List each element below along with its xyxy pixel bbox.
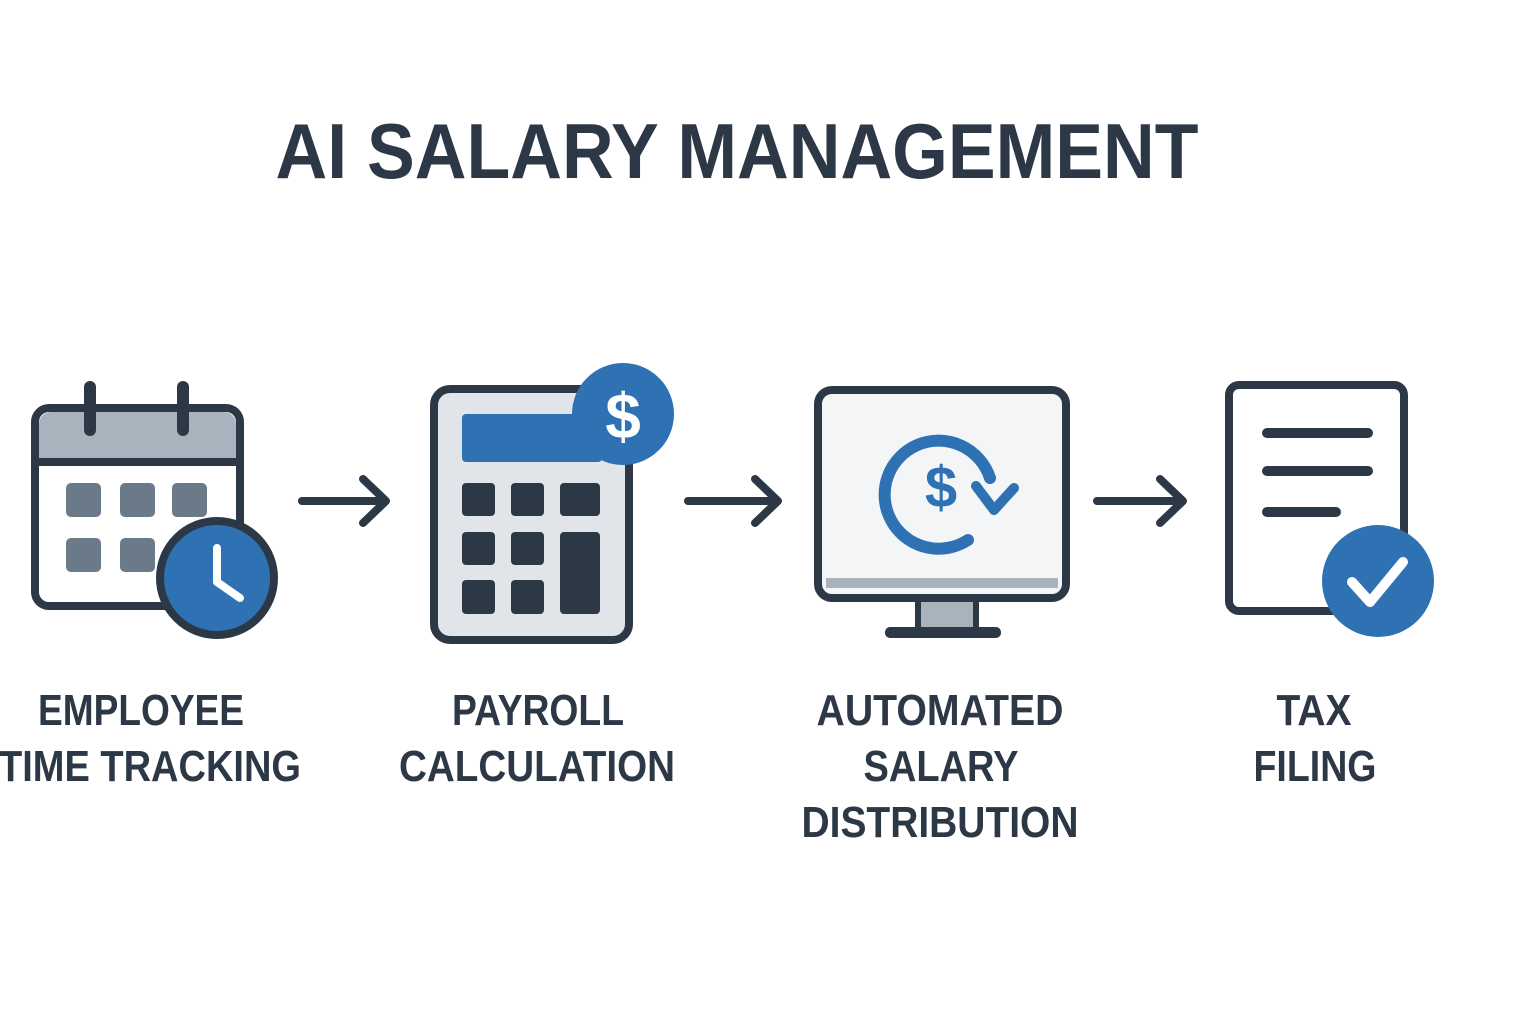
label: automated salary distribution: SALARY (864, 742, 1018, 791)
title: AI SALARY MANAGEMENT (276, 107, 1198, 195)
arrow 2 (688, 479, 778, 523)
icon: monitor with circular dollar (818, 390, 1066, 638)
icon: calculator with dollar (434, 363, 674, 640)
label: employee time tracking: EMPLOYEE (38, 686, 244, 735)
label: payroll calculation (399, 686, 675, 791)
label: tax filing: TAX (1276, 686, 1352, 735)
label: automated salary distribution (802, 686, 1078, 847)
arrow 1 (302, 479, 386, 523)
icon: calculator with dollar: $ (605, 380, 641, 452)
icon: calendar with clock (35, 387, 274, 635)
label: payroll calculation: PAYROLL (452, 686, 624, 735)
icon: monitor with circular dollar: $ (925, 455, 957, 520)
icon: tax document with check (1229, 385, 1434, 637)
label: employee time tracking (0, 686, 301, 791)
label: automated salary distribution: DISTRIBUTION (802, 798, 1078, 847)
label: employee time tracking: TIME TRACKING (0, 742, 301, 791)
arrow 3 (1097, 479, 1183, 523)
label: payroll calculation: CALCULATION (399, 742, 675, 791)
label: automated salary distribution: AUTOMATED (816, 686, 1064, 735)
label: tax filing: FILING (1254, 742, 1376, 791)
label: tax filing (1254, 686, 1376, 791)
